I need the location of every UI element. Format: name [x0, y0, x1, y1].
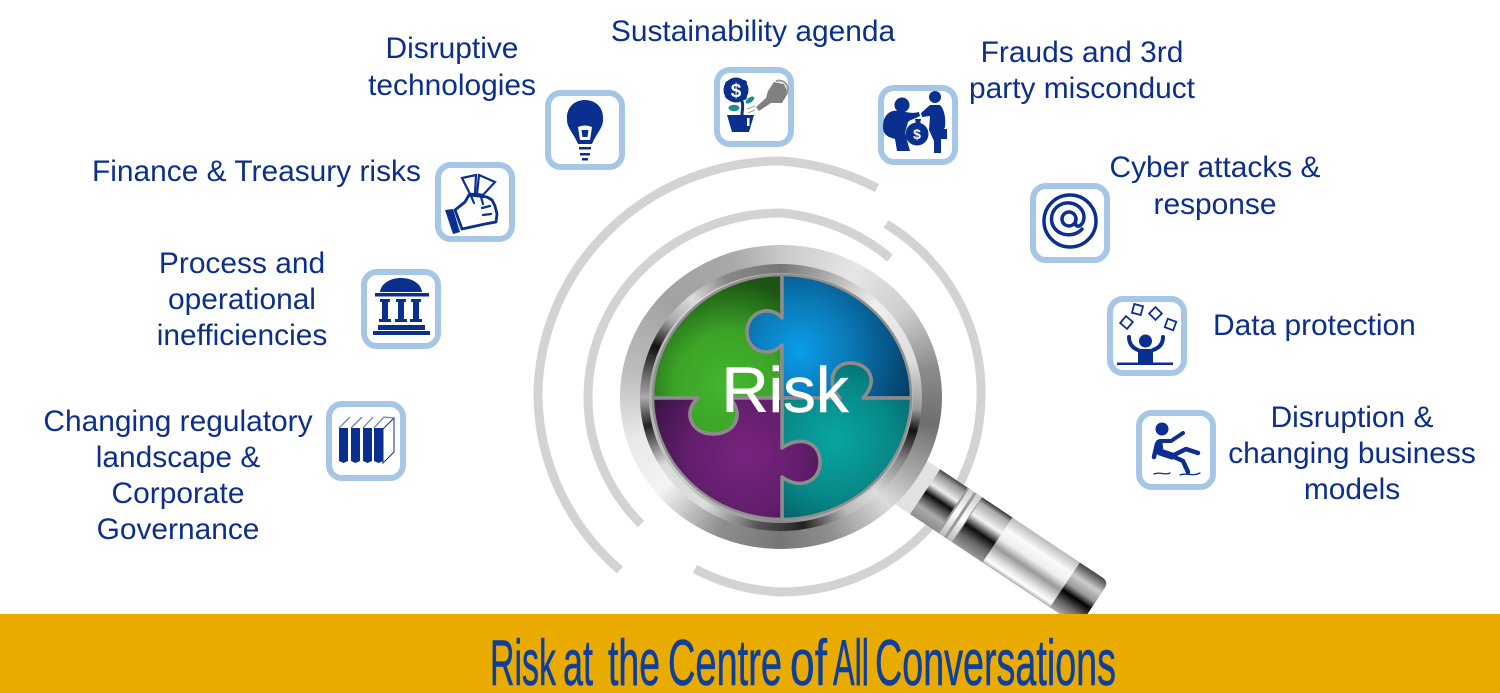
icon: person slipping: [1139, 413, 1213, 487]
puzzle piece: purple: [654, 396, 822, 518]
banner: [0, 614, 1500, 693]
label: Process and operational inefficiencies: operational: [168, 283, 316, 316]
label: Cyber attacks & response: response: [1154, 188, 1276, 221]
icon: institution building: [364, 272, 438, 346]
icon: hand holding money: [438, 165, 512, 239]
concentric arc: outer left: [538, 161, 877, 570]
label: Changing regulatory landscape & Corporate Governance: Governance: [97, 513, 259, 546]
icon: row of books: [329, 404, 403, 478]
magnifier handle: [870, 443, 1109, 627]
icon: plant and watering can: $: [731, 81, 742, 102]
label: Sustainability agenda: Sustainability agenda: [611, 15, 895, 48]
label: Disruptive technologies: Disruptive: [386, 32, 518, 65]
label: Cyber attacks & response: Cyber attacks &: [1110, 151, 1321, 184]
label: Disruption & changing business models: changing business: [1228, 437, 1476, 470]
concentric arc: right and bottom: [695, 224, 981, 592]
puzzle piece: blue: [745, 276, 910, 396]
label: Frauds and 3rd party misconduct: Frauds and 3rd: [981, 36, 1183, 69]
icon: light bulb: [548, 93, 622, 167]
icon: plant and watering can: [717, 70, 791, 144]
icon: juggling person: [1110, 299, 1184, 373]
label: Disruption & changing business models: models: [1304, 473, 1400, 506]
icon: at sign: [1033, 186, 1107, 260]
icon: fraud handover: $: [913, 126, 921, 142]
puzzle piece: green: [654, 276, 780, 432]
label: Data protection: Data protection: [1213, 309, 1416, 342]
puzzle piece: teal: [784, 361, 910, 518]
label: Disruption & changing business models: Disruption &: [1271, 401, 1433, 434]
banner title: [490, 626, 1116, 693]
label: Changing regulatory landscape & Corporate Governance: Corporate: [112, 477, 244, 510]
magnifier bezel: [615, 240, 950, 555]
label: Finance & Treasury risks: Finance & Treasury risks: [92, 155, 421, 188]
label: Process and operational inefficiencies: inefficiencies: [157, 319, 327, 352]
label: Changing regulatory landscape & Corporate Governance: Changing regulatory: [43, 405, 313, 438]
label: Changing regulatory landscape & Corporate Governance: landscape &: [96, 441, 260, 474]
label: Process and operational inefficiencies: Process and: [159, 247, 325, 280]
center word: Risk: Risk: [722, 354, 850, 426]
icon: fraud handover: [881, 88, 955, 162]
concentric arc: inner left: [588, 213, 890, 524]
puzzle lens: [654, 276, 910, 518]
label: Disruptive technologies: technologies: [368, 69, 536, 102]
lens rim: [653, 275, 911, 519]
label: Frauds and 3rd party misconduct: party misconduct: [969, 72, 1196, 105]
